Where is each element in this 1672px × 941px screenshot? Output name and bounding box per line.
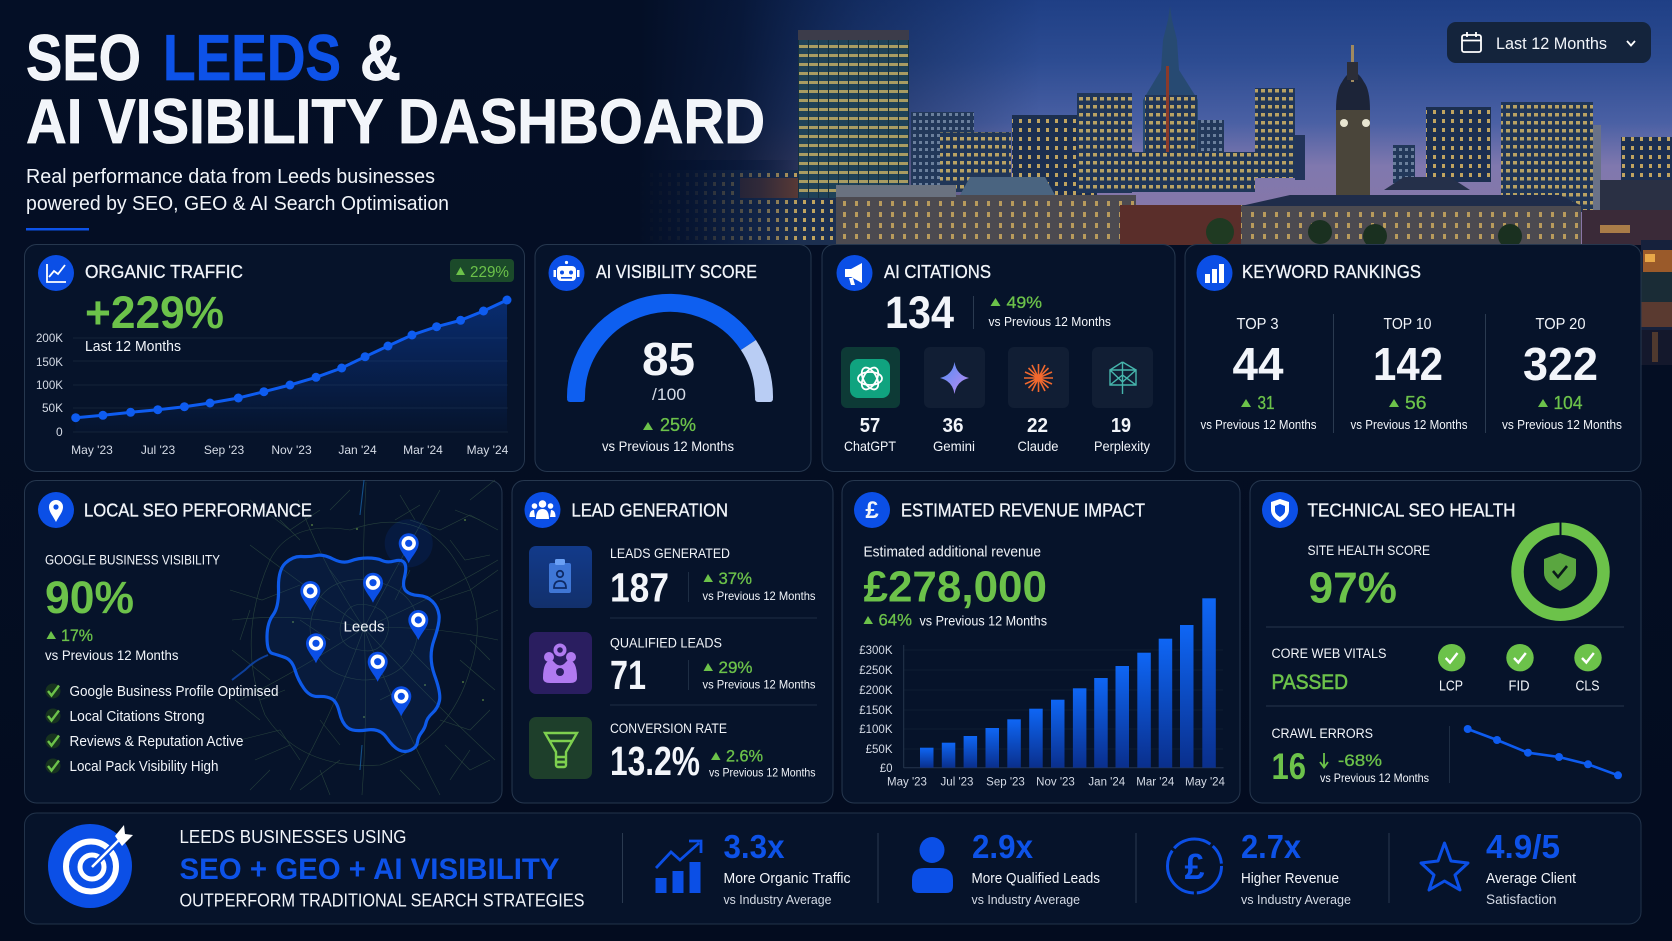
- line chart: May '24: [467, 443, 509, 457]
- icon: megaphone: [836, 255, 872, 291]
- row: leads generated: LEADS GENERATED: [610, 546, 730, 561]
- tile: Gemini: [924, 347, 985, 454]
- row: leads generated: 187: [610, 565, 669, 611]
- stat: client satisfaction: 4.9/5: [1486, 828, 1560, 865]
- column: top 20: 322: [1523, 338, 1598, 390]
- line chart: Sep '23: [204, 443, 244, 457]
- badge: [450, 259, 514, 282]
- panel: technical SEO health: -68%: [1338, 751, 1382, 770]
- panel: AI visibility score: 85: [642, 333, 695, 385]
- map pins: [300, 533, 428, 716]
- column: top 3: TOP 3: [1236, 316, 1279, 333]
- row: conversion rate: 13.2%: [610, 738, 700, 784]
- panel: technical SEO health: CORE WEB VITALS: [1272, 646, 1386, 661]
- crawl errors sparkline: [1464, 725, 1622, 779]
- icon: pound: £: [865, 497, 879, 524]
- panel: organic traffic: +229%: [85, 287, 224, 338]
- panel: technical SEO health: 16: [1272, 746, 1306, 787]
- stat: client satisfaction: Average Client: [1486, 871, 1576, 887]
- bar chart: [859, 598, 1226, 789]
- panel: AI citations: 49%: [1006, 293, 1042, 312]
- title: [26, 21, 765, 157]
- bar chart: May '23: [887, 777, 927, 789]
- vitals: LCP FID CLS: FID: [1508, 679, 1530, 695]
- panel: AI citations: [822, 244, 1175, 472]
- panel: estimated revenue impact: £278,000: [864, 563, 1047, 612]
- tile: ChatGPT: ChatGPT: [844, 438, 896, 454]
- stat: organic traffic: [656, 828, 850, 907]
- subtitle: [26, 165, 449, 215]
- tile: ChatGPT: 57: [860, 415, 880, 437]
- column: top 10: vs Previous 12 Months: [1350, 417, 1468, 432]
- column: top 20: TOP 20: [1536, 316, 1586, 333]
- stat: revenue: £: [1184, 846, 1205, 887]
- bar chart: £200K: [859, 685, 893, 697]
- panel: local SEO performance: 17%: [61, 626, 93, 645]
- row: qualified leads: 71: [610, 652, 646, 698]
- panel: estimated revenue impact: [842, 480, 1240, 803]
- row: conversion rate: 2.6%: [726, 748, 763, 766]
- panel: estimated revenue impact: 64%: [878, 611, 912, 630]
- stat: client satisfaction: Satisfaction: [1486, 891, 1556, 907]
- column: top 20: [1502, 316, 1622, 432]
- stat: organic traffic: vs Industry Average: [724, 892, 832, 907]
- bar chart: Jan '24: [1088, 777, 1126, 789]
- stat: revenue: [1168, 828, 1351, 907]
- checklist: Reviews & Reputation Active: [70, 734, 244, 750]
- line chart: [36, 296, 512, 457]
- stat: client satisfaction: [1421, 828, 1576, 907]
- line chart: Mar '24: [403, 443, 443, 457]
- tile: Perplexity: [1092, 347, 1153, 454]
- column: top 3: vs Previous 12 Months: [1200, 417, 1317, 432]
- tile: Perplexity: 19: [1111, 415, 1131, 437]
- bar chart: £50K: [866, 744, 893, 756]
- checklist: [46, 684, 278, 775]
- panel: technical SEO health: vs Previous 12 Months: [1320, 771, 1429, 785]
- arrow: down: [1320, 753, 1328, 768]
- stat: revenue: vs Industry Average: [1241, 892, 1351, 907]
- column: top 3: [1200, 316, 1317, 432]
- bar chart: £250K: [859, 665, 893, 677]
- stat: organic traffic: More Organic Traffic: [724, 871, 850, 887]
- badge: 229%: [470, 264, 509, 281]
- column: top 20: 104: [1554, 393, 1582, 413]
- bar chart: Mar '24: [1136, 777, 1175, 789]
- panel: technical SEO health: SITE HEALTH SCORE: [1308, 543, 1430, 558]
- line chart: Nov '23: [271, 443, 312, 457]
- panel: estimated revenue impact: ESTIMATED REVENUE IMPACT: [901, 501, 1145, 521]
- tile: Gemini: Gemini: [933, 438, 975, 454]
- bar chart: £150K: [859, 705, 893, 717]
- line chart: May '23: [71, 443, 113, 457]
- column: top 10: [1350, 316, 1468, 432]
- stat: qualified leads: [912, 828, 1100, 907]
- panel: technical SEO health: CRAWL ERRORS: [1272, 726, 1373, 741]
- icon: target: [48, 824, 133, 908]
- vitals: LCP FID CLS: LCP: [1439, 679, 1463, 695]
- icon: location pin: [38, 492, 74, 528]
- panel: keyword rankings: KEYWORD RANKINGS: [1242, 262, 1421, 282]
- tile: ChatGPT: [841, 347, 900, 454]
- line chart: 100K: [36, 378, 63, 392]
- panel: lead generation: [512, 480, 833, 803]
- bar chart: May '24: [1185, 777, 1226, 789]
- panel: technical SEO health: TECHNICAL SEO HEALTH: [1308, 501, 1516, 521]
- row: conversion rate: [529, 717, 816, 784]
- panel: organic traffic: [24, 244, 524, 472]
- health ring: [1518, 522, 1604, 615]
- title: &: [360, 21, 401, 94]
- vitals: LCP FID CLS: [1438, 644, 1602, 695]
- region outline: [267, 555, 440, 752]
- line chart: 150K: [36, 355, 63, 369]
- panel: local SEO performance: vs Previous 12 Months: [45, 647, 178, 663]
- tile: Perplexity: Perplexity: [1094, 438, 1150, 454]
- line chart: Jul '23: [141, 443, 175, 457]
- icon: people: [524, 492, 560, 528]
- panel: AI citations: vs Previous 12 Months: [988, 314, 1111, 329]
- map: [230, 480, 498, 795]
- bar chart: £100K: [859, 724, 893, 736]
- panel: lead generation: LEAD GENERATION: [572, 501, 728, 521]
- stat: qualified leads: vs Industry Average: [972, 892, 1080, 907]
- icon: line chart: [38, 255, 74, 291]
- panel: local SEO performance: GOOGLE BUSINESS VISIBILITY: [45, 553, 220, 568]
- row: qualified leads: [529, 632, 817, 706]
- line chart: 0: [56, 425, 63, 439]
- icon: robot: [548, 255, 584, 291]
- checklist: Google Business Profile Optimised: [70, 684, 278, 700]
- stat: qualified leads: More Qualified Leads: [972, 871, 1100, 887]
- icon: calendar: [1462, 32, 1481, 52]
- panel: estimated revenue impact: Estimated additional revenue: [864, 545, 1041, 561]
- tile: Claude: 22: [1027, 415, 1048, 437]
- date filter: [1447, 22, 1651, 63]
- row: leads generated: [529, 546, 817, 618]
- row: qualified leads: vs Previous 12 Months: [702, 678, 816, 692]
- bar chart: Sep '23: [986, 777, 1025, 789]
- line chart: 50K: [42, 401, 63, 415]
- panel: AI citations: 134: [885, 287, 954, 338]
- title: AI VISIBILITY DASHBOARD: [26, 87, 765, 157]
- bar chart: £300K: [859, 645, 893, 657]
- skyline photo: [640, 0, 1672, 365]
- map: Leeds: [344, 619, 384, 636]
- stat: qualified leads: 2.9x: [972, 828, 1034, 865]
- date filter: Last 12 Months: [1496, 35, 1607, 53]
- line chart: 200K: [36, 331, 63, 345]
- stat: revenue: 2.7x: [1241, 828, 1302, 865]
- column: top 3: 44: [1232, 338, 1284, 390]
- column: top 20: vs Previous 12 Months: [1502, 417, 1622, 432]
- tile: Claude: [1008, 347, 1069, 454]
- panel: AI visibility score: [535, 244, 811, 472]
- panel: AI visibility score: 25%: [660, 415, 696, 435]
- panel: technical SEO health: [1250, 480, 1641, 803]
- bar chart: Jul '23: [941, 777, 973, 789]
- panel: AI citations: AI CITATIONS: [884, 262, 991, 282]
- gauge: [567, 303, 773, 402]
- checklist: Local Pack Visibility High: [70, 759, 218, 775]
- row: conversion rate: vs Previous 12 Months: [709, 766, 816, 780]
- panel: local SEO performance: [24, 480, 502, 803]
- column: top 10: 142: [1373, 338, 1443, 390]
- panel: estimated revenue impact: vs Previous 12 Months: [920, 613, 1047, 629]
- row: leads generated: vs Previous 12 Months: [702, 589, 816, 603]
- panel: AI visibility score: vs Previous 12 Months: [602, 439, 734, 454]
- column: top 10: 56: [1405, 393, 1426, 413]
- panel: local SEO performance: 90%: [45, 572, 134, 623]
- row: qualified leads: QUALIFIED LEADS: [610, 636, 722, 651]
- vitals: LCP FID CLS: CLS: [1576, 679, 1600, 695]
- column: top 10: TOP 10: [1384, 316, 1432, 333]
- panel: bottom summary: SEO + GEO + AI VISIBILITY: [180, 853, 560, 886]
- panel: local SEO performance: LOCAL SEO PERFORMANCE: [84, 501, 312, 521]
- panel: bottom summary: [24, 813, 1641, 924]
- title: SEO: [26, 21, 141, 94]
- panel: AI visibility score: AI VISIBILITY SCORE: [596, 262, 757, 282]
- panel: bottom summary: LEEDS BUSINESSES USING: [180, 826, 406, 847]
- icon: shield: [1262, 492, 1298, 528]
- title: LEEDS: [163, 21, 341, 94]
- panel: technical SEO health: 97%: [1308, 564, 1397, 613]
- row: qualified leads: 29%: [718, 659, 753, 677]
- panel: AI visibility score: /100: [652, 385, 686, 404]
- column: top 3: 31: [1258, 393, 1274, 413]
- stat: revenue: Higher Revenue: [1241, 871, 1339, 887]
- icon: pound: [854, 492, 890, 528]
- panel: organic traffic: ORGANIC TRAFFIC: [85, 262, 243, 282]
- stat: organic traffic: 3.3x: [724, 828, 785, 865]
- row: conversion rate: CONVERSION RATE: [610, 721, 727, 736]
- subtitle: powered by SEO, GEO & AI Search Optimisation: [26, 192, 449, 215]
- panel: keyword rankings: [1185, 244, 1641, 472]
- panel: organic traffic: Last 12 Months: [85, 339, 181, 355]
- tile: Gemini: 36: [942, 415, 964, 437]
- row: leads generated: 37%: [718, 570, 752, 588]
- tile: Claude: Claude: [1018, 438, 1059, 454]
- bar chart: Nov '23: [1036, 777, 1075, 789]
- icon: bars: [1196, 255, 1232, 291]
- panel: technical SEO health: PASSED: [1272, 671, 1348, 694]
- checklist: Local Citations Strong: [70, 709, 204, 725]
- panel: bottom summary: OUTPERFORM TRADITIONAL SEARCH STRATEGIES: [180, 891, 584, 911]
- bar chart: £0: [880, 763, 892, 775]
- subtitle: Real performance data from Leeds businesses: [26, 165, 435, 188]
- line chart: Jan '24: [338, 443, 377, 457]
